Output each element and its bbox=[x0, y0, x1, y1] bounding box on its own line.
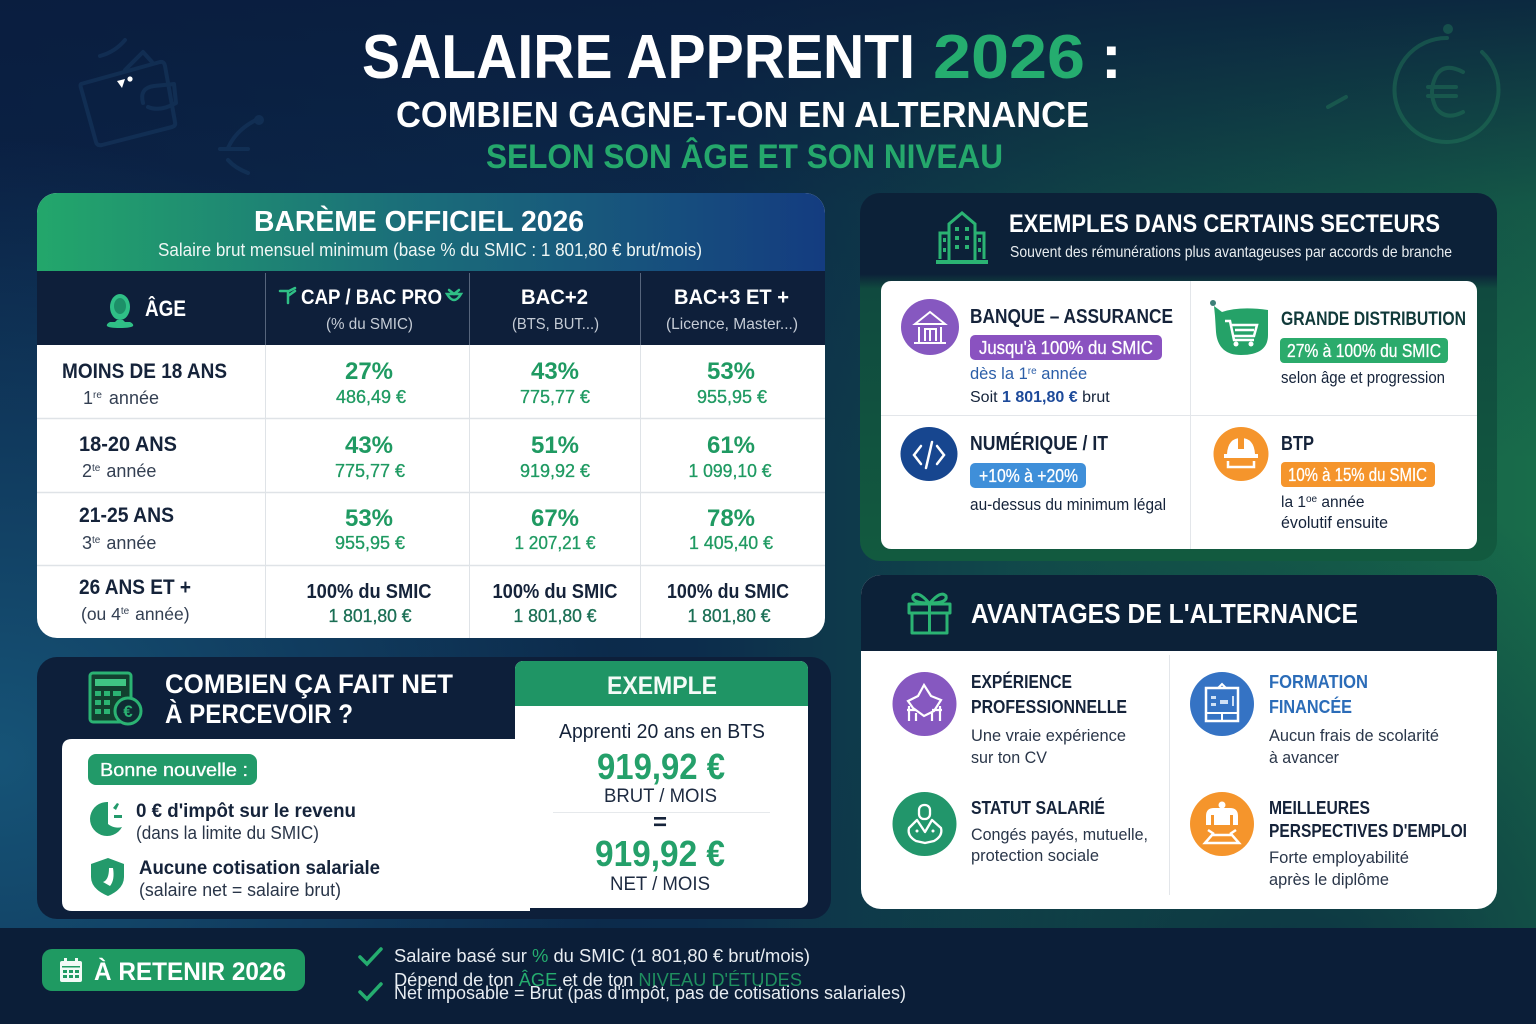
row: 21-25 ans: 53% bbox=[345, 505, 393, 532]
row: 26 ans et plus: 1 801,80 € bbox=[514, 606, 596, 626]
sector: banque assurance: Jusqu'à 100% du SMIC bbox=[979, 338, 1153, 358]
advantage: expérience bbox=[892, 671, 1127, 767]
row: moins de 18 ans: 53% bbox=[707, 358, 755, 385]
column header: bac+3: BAC+3 ET + bbox=[674, 286, 789, 309]
advantage: perspectives d'emploi: après le diplôme bbox=[1269, 870, 1389, 889]
row: 21-25 ans: 21-25 ANS bbox=[79, 504, 174, 527]
icon: calendar bbox=[60, 958, 82, 982]
row: 18-20 ans: 43% bbox=[345, 432, 393, 459]
table subheading: Salaire brut mensuel minimum (base % du SMIC : 1 801,80 € brut/mois) bbox=[158, 240, 702, 260]
title bbox=[362, 23, 1122, 176]
sector: grande distribution: 27% à 100% du SMIC bbox=[1287, 341, 1441, 361]
sector: banque assurance: dès la 1 bbox=[970, 365, 1028, 383]
column header: bac+2: BAC+2 bbox=[521, 286, 588, 309]
sector: btp: la 1 bbox=[1281, 494, 1306, 511]
advantage: expérience: EXPÉRIENCE bbox=[971, 671, 1072, 692]
sector: numérique: au-dessus du minimum légal bbox=[970, 496, 1166, 514]
row: 21-25 ans: 955,95 € bbox=[335, 533, 405, 553]
sector: btp: oe bbox=[1306, 494, 1318, 505]
sector: banque assurance: re bbox=[1028, 366, 1037, 377]
row: 18-20 ans: te bbox=[92, 463, 101, 474]
panel: net à percevoir bbox=[37, 657, 831, 919]
example description: Apprenti 20 ans en BTS bbox=[559, 721, 765, 743]
equals sign: = bbox=[653, 809, 667, 836]
advantage: formation: FORMATION bbox=[1269, 671, 1368, 692]
row: 26 ans et plus: année) bbox=[130, 604, 190, 624]
advantage: expérience: Une vraie expérience bbox=[971, 726, 1126, 745]
icon: gift bbox=[909, 594, 950, 633]
card: exemple: EXEMPLE bbox=[607, 672, 717, 700]
contribution line: Aucune cotisation salariale bbox=[139, 857, 380, 879]
row: 26 ans et plus: 26 ANS ET + bbox=[79, 576, 191, 599]
sector: numérique: NUMÉRIQUE / IT bbox=[970, 432, 1108, 455]
row: moins de 18 ans: MOINS DE 18 ANS bbox=[62, 360, 227, 383]
icon: cap right bbox=[447, 290, 461, 300]
row: 18-20 ans: 919,92 € bbox=[520, 461, 590, 481]
advantage: formation: à avancer bbox=[1269, 748, 1339, 767]
row: 18-20 ans: 2 bbox=[82, 461, 92, 481]
row: 26 ans et plus: 1 801,80 € bbox=[688, 606, 770, 626]
row: moins de 18 ans: 486,49 € bbox=[336, 387, 406, 407]
row: moins de 18 ans: 775,77 € bbox=[520, 387, 590, 407]
row: 26 ans et plus: (ou 4 bbox=[81, 604, 121, 624]
card: exemple bbox=[515, 661, 808, 908]
panel: exemples dans certains secteurs bbox=[860, 193, 1497, 561]
row: 18-20 ans: 61% bbox=[707, 432, 755, 459]
sector: grande distribution: selon âge et progression bbox=[1281, 369, 1445, 387]
net heading line 2: À PERCEVOIR ? bbox=[165, 698, 353, 729]
sectors heading: EXEMPLES DANS CERTAINS SECTEURS bbox=[1009, 210, 1440, 238]
sector: grande distribution bbox=[1210, 300, 1466, 387]
sector: banque assurance: BANQUE – ASSURANCE bbox=[970, 306, 1173, 328]
title line 1: SALAIRE APPRENTI bbox=[362, 23, 915, 92]
row: 26 ans et plus: te bbox=[121, 606, 130, 617]
icon: no tax bbox=[90, 802, 122, 836]
advantage: expérience: PROFESSIONNELLE bbox=[971, 696, 1127, 717]
advantages heading: AVANTAGES DE L'ALTERNANCE bbox=[971, 598, 1358, 629]
icon: age pin bbox=[107, 294, 133, 328]
icon: shield bbox=[91, 858, 124, 896]
sector: btp: BTP bbox=[1281, 433, 1314, 455]
pill: bonne nouvelle: Bonne nouvelle : bbox=[100, 760, 248, 780]
sector: btp: évolutif ensuite bbox=[1281, 514, 1388, 532]
footer band bbox=[0, 928, 1536, 1024]
net label: NET / MOIS bbox=[610, 874, 710, 895]
tax note: (dans la limite du SMIC) bbox=[136, 823, 319, 843]
row: moins de 18 ans: 27% bbox=[345, 358, 393, 385]
check 2 bbox=[360, 984, 381, 999]
takeaway 2: Dépend de ton ÂGE et de ton NIVEAU D'ÉTUDES bbox=[394, 970, 802, 990]
advantage: formation: FINANCÉE bbox=[1269, 696, 1352, 717]
row: 18-20 ans: 51% bbox=[531, 432, 579, 459]
gross label: BRUT / MOIS bbox=[604, 786, 717, 807]
table heading: BARÈME OFFICIEL 2026 bbox=[254, 204, 584, 238]
advantage: formation: Aucun frais de scolarité bbox=[1269, 726, 1439, 745]
row: 26 ans et plus: 100% du SMIC bbox=[492, 581, 618, 603]
decorative icon: wallet bbox=[80, 40, 262, 173]
row: moins de 18 ans bbox=[62, 358, 767, 408]
row: moins de 18 ans: 43% bbox=[531, 358, 579, 385]
row: 26 ans et plus: 1 801,80 € bbox=[328, 606, 412, 626]
sector: btp bbox=[1214, 427, 1435, 532]
row: 21-25 ans: 78% bbox=[707, 505, 755, 532]
advantage: perspectives d'emploi bbox=[1190, 792, 1467, 889]
row: 18-20 ans bbox=[79, 432, 772, 481]
row: moins de 18 ans: 955,95 € bbox=[697, 387, 767, 407]
icon: cap left bbox=[280, 288, 295, 303]
row: moins de 18 ans: re bbox=[93, 390, 102, 401]
advantage: expérience: sur ton CV bbox=[971, 748, 1048, 767]
title line 1: : bbox=[1101, 23, 1122, 92]
row: 18-20 ans: année bbox=[101, 461, 156, 481]
row: 21-25 ans: 1 405,40 € bbox=[689, 533, 773, 553]
panel: avantages bbox=[861, 575, 1497, 909]
net heading: COMBIEN ÇA FAIT NET bbox=[165, 669, 453, 699]
decorative icon: euro coin bbox=[1328, 26, 1499, 142]
tax line: 0 € d'impôt sur le revenu bbox=[136, 800, 356, 822]
row: 21-25 ans: 1 207,21 € bbox=[514, 533, 596, 553]
column sub: smic: (% du SMIC) bbox=[326, 316, 413, 333]
gross amount: 919,92 € bbox=[597, 746, 725, 787]
check 1 bbox=[360, 949, 381, 964]
sector: banque assurance bbox=[901, 299, 1173, 406]
advantage: statut salarié: Congés payés, mutuelle, bbox=[971, 825, 1148, 844]
sector: banque assurance: année bbox=[1037, 365, 1087, 383]
column header: age: ÂGE bbox=[145, 296, 186, 321]
row: 21-25 ans: 67% bbox=[531, 505, 579, 532]
row: 18-20 ans: 775,77 € bbox=[335, 461, 405, 481]
white card bbox=[62, 739, 530, 911]
row: 26 ans et plus: 100% du SMIC bbox=[667, 581, 789, 603]
sector: numérique bbox=[900, 427, 1166, 514]
column sub: bts: (BTS, BUT...) bbox=[512, 316, 599, 333]
takeaway 3: Net imposable = Brut (pas d'impôt, pas de cotisations salariales) bbox=[394, 983, 906, 1003]
advantage: formation bbox=[1190, 671, 1439, 767]
pill: à retenir: À RETENIR 2026 bbox=[94, 957, 286, 986]
row: 26 ans et plus: 100% du SMIC bbox=[306, 581, 432, 603]
advantage: statut salarié bbox=[892, 792, 1148, 865]
advantage: perspectives d'emploi: Forte employabilité bbox=[1269, 848, 1409, 867]
row: 18-20 ans: 1 099,10 € bbox=[688, 461, 772, 481]
row: 21-25 ans: 3 bbox=[82, 533, 92, 553]
sector: banque assurance: Soit 1 801,80 € brut bbox=[970, 389, 1110, 406]
sector: grande distribution: GRANDE DISTRIBUTION bbox=[1281, 309, 1466, 330]
icon: calculator euro bbox=[90, 673, 141, 724]
column header: cap bac pro: CAP / BAC PRO bbox=[301, 286, 442, 309]
row: 21-25 ans: année bbox=[101, 533, 156, 553]
decorative sparkle marks bbox=[117, 76, 133, 88]
row: 18-20 ans: 18-20 ANS bbox=[79, 433, 177, 456]
title line 2: COMBIEN GAGNE-T-ON EN ALTERNANCE bbox=[396, 94, 1089, 135]
sector: btp: année bbox=[1317, 494, 1365, 511]
sector: btp: 10% à 15% du SMIC bbox=[1288, 465, 1427, 485]
advantage: perspectives d'emploi: PERSPECTIVES D'EMPLOI bbox=[1269, 820, 1467, 841]
icon: building bbox=[936, 213, 988, 262]
advantage: perspectives d'emploi: MEILLEURES bbox=[1269, 797, 1370, 818]
advantage: statut salarié: STATUT SALARIÉ bbox=[971, 797, 1105, 818]
row: moins de 18 ans: 1 bbox=[83, 388, 93, 408]
takeaway 1: Salaire basé sur % du SMIC (1 801,80 € brut/mois) bbox=[394, 946, 810, 966]
contribution note: (salaire net = salaire brut) bbox=[139, 880, 341, 900]
pill: bonne nouvelle bbox=[88, 754, 257, 785]
title line 3: SELON SON ÂGE ET SON NIVEAU bbox=[486, 138, 1003, 176]
title line 1: 2026 bbox=[933, 23, 1085, 92]
row: 21-25 ans: te bbox=[92, 535, 101, 546]
advantage: statut salarié: protection sociale bbox=[971, 846, 1099, 865]
icon: calculator euro: € bbox=[123, 702, 133, 721]
sector: numérique: +10% à +20% bbox=[979, 466, 1078, 486]
pill: à retenir bbox=[42, 949, 305, 991]
row: 26 ans et plus bbox=[79, 576, 789, 626]
column sub: licence: (Licence, Master...) bbox=[666, 316, 798, 333]
sectors white card bbox=[881, 281, 1477, 549]
row: moins de 18 ans: année bbox=[104, 388, 159, 408]
row: 21-25 ans bbox=[79, 504, 773, 553]
panel: barème officiel bbox=[37, 193, 825, 638]
net amount: 919,92 € bbox=[595, 833, 725, 874]
sectors subheading: Souvent des rémunérations plus avantageuses par accords de branche bbox=[1010, 244, 1452, 261]
